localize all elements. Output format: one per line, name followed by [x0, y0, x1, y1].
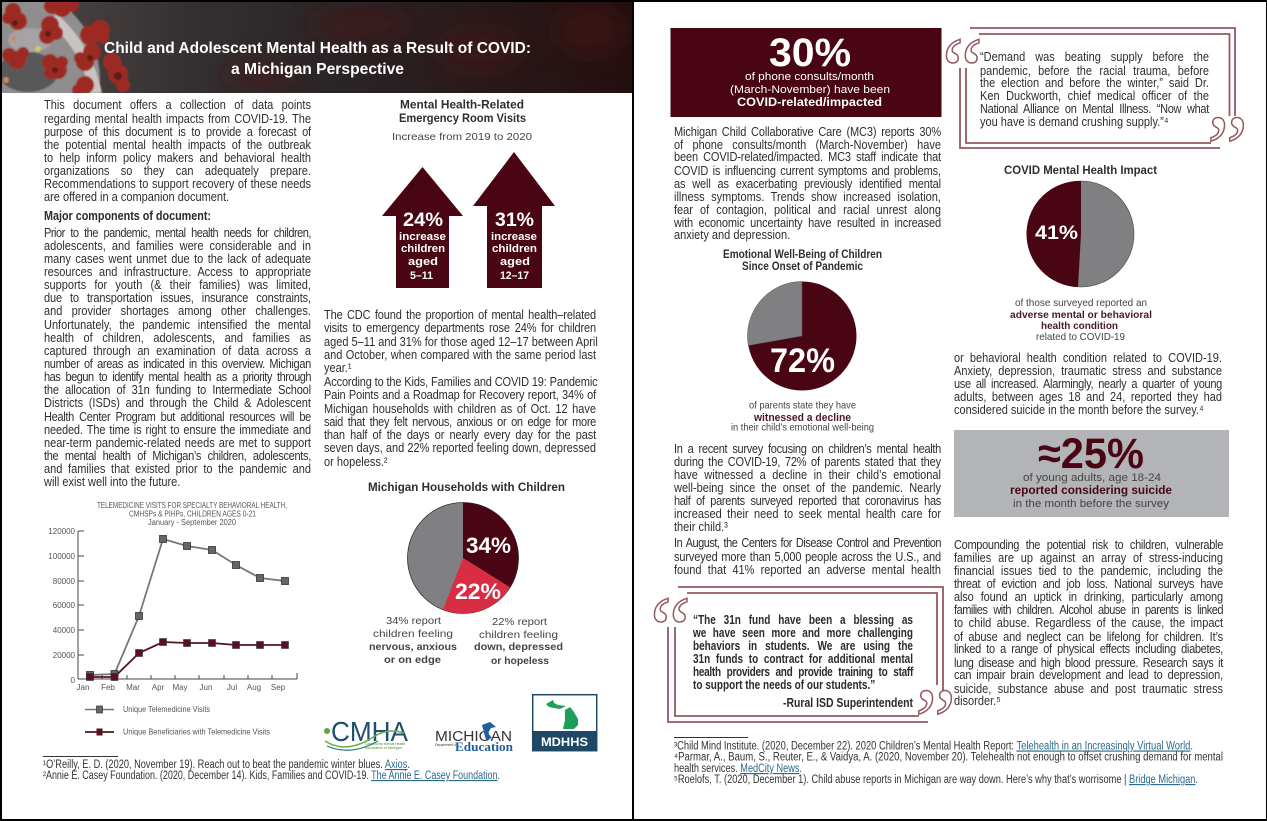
callout: 30% phone consults: COVID-related/impacted [737, 97, 882, 109]
paragraph: MC3: COVID is influencing current symptoms and problems, [674, 164, 941, 178]
x axis labels: May [172, 683, 188, 692]
major components paragraph: supports for youth (& their families) was limited, [44, 278, 311, 292]
quote frame: rural ISD superintendent [650, 578, 956, 772]
quote frame: Dr. Ken Duckworth: ” [1207, 97, 1248, 199]
footnotes right: health services. MedCity News. [674, 763, 802, 775]
major components paragraph: and families that existed prior to the pandemic and [44, 462, 311, 476]
paragraph: compounding risk: families with children. Alcohol abuse in parents is linked [954, 603, 1223, 617]
major components paragraph: many cases went unmet due to the lack of adequate [44, 252, 311, 266]
y axis labels: 40000 [53, 626, 76, 635]
line chart: telemedicine visits [48, 501, 297, 736]
footnotes left: ²Annie E. Casey Foundation. (2020, December 14). Kids, Families and COVID-19. The Annie E. Casey Foundation. [43, 770, 500, 782]
quote frame: rural ISD superintendent: “ [650, 578, 691, 680]
callout: 25% young adults: of young adults, age 18-24 [1023, 472, 1161, 484]
caption: witnessed a decline: witnessed a decline [753, 412, 851, 424]
paragraph: MC3: as well as exacerbating previously identified mental [674, 176, 941, 190]
x axis labels: Jan [77, 683, 89, 692]
paragraph: Kids, Families and COVID 19: said that they felt nervous, anxious or on edge for more [324, 415, 596, 429]
paragraph: Kids, Families and COVID 19: seven days, and 22% reported feeling down, depressed [324, 441, 596, 455]
logo: Michigan Department of Education: Department of [435, 743, 457, 747]
arrow: 24% children aged 5-11: increase [399, 231, 446, 243]
pie chart: Michigan households: 22% [455, 579, 501, 604]
paragraph: compounding risk: disorder.⁵ [954, 694, 1001, 708]
paragraph: Kids, Families and COVID 19: Pain Points and a Roadmap for Recovery report, 34% of [324, 388, 596, 402]
title [104, 40, 531, 78]
intro paragraph [44, 98, 312, 204]
paragraph: MC3: Michigan Child Collaborative Care (MC3) reports 30% [674, 125, 941, 139]
paragraph: MC3: with economic uncertainty have resulted in increased [674, 216, 941, 230]
legend: Unique Beneficiaries with Telemedicine Visits [123, 728, 270, 736]
paragraph: CDC survey: In August, the Centers for Disease Control and Prevention [674, 536, 941, 550]
header banner [2, 2, 632, 93]
paragraph: CDC: visits to emergency departments rose 24% for children [324, 321, 596, 335]
quote text: rural ISD superintendent: health providers and provide training to staff [693, 665, 913, 679]
paragraph: CDC survey [674, 536, 941, 577]
paragraph: compounding risk [954, 538, 1224, 708]
y axis labels: 120000 [48, 527, 76, 536]
x axis labels: Sep [271, 683, 286, 692]
x axis labels: Apr [152, 683, 165, 692]
logo: Michigan Department of Education: MICHIGAN [435, 728, 512, 745]
label: 22% report: or hopeless [491, 655, 549, 667]
paragraph: MC3: been COVID-related/impacted. MC3 staff indicate that [674, 150, 941, 164]
chart title: CMHSPs & PIHPs, CHILDREN AGES 0-21 [129, 510, 256, 518]
intro paragraph: purpose of this document is to provide a forecast of [44, 125, 311, 139]
callout: 30% phone consults: of phone consults/month [745, 71, 874, 83]
callout: 30% phone consults: (March-November) have been [730, 84, 890, 96]
major components paragraph: Districts (ISDs) and through the Child & Adolescent [44, 396, 311, 410]
pie chart: Michigan households [408, 502, 518, 614]
y axis labels: 100000 [48, 552, 76, 561]
x axis labels: Jun [200, 683, 212, 692]
quote text: rural ISD superintendent: “The 31n fund have been a blessing as [693, 613, 913, 627]
x axis labels: Aug [247, 683, 261, 692]
heading: emotional well-being [723, 249, 882, 273]
footnotes right [674, 738, 1223, 786]
paragraph: MC3: illness symptoms. Trends show increased isolation, [674, 190, 941, 204]
paragraph: compounding risk: linked to a range of physical effects including diabetes, [954, 642, 1223, 656]
quote frame: Dr. Ken Duckworth [942, 19, 1248, 199]
logo: CMHA: Community Mental Health [365, 742, 405, 746]
callout: 25% young adults: ≈25% [1038, 430, 1144, 478]
paragraph: behavioral health: Anxiety, depression, traumatic stress and substance [954, 364, 1222, 378]
callout: 30% phone consults: 30% [769, 31, 851, 75]
label: 22% report [474, 616, 563, 667]
logo: CMHA: Association of Michigan [365, 746, 402, 750]
legend [85, 705, 270, 736]
paragraph: behavioral health: considered suicide in the month before the survey.⁴ [954, 403, 1204, 417]
label: 34% report: children feeling [373, 628, 453, 640]
x axis labels [77, 683, 286, 692]
footnotes left [43, 756, 500, 782]
label: 22% report: children feeling [479, 629, 558, 641]
arrow: 24% children aged 5-11: aged [408, 256, 438, 268]
arrow: 31% children aged 12-17: aged [500, 256, 530, 268]
paragraph: CDC survey: surveyed more than 5,000 people across the U.S., and [674, 550, 941, 564]
series: unique beneficiaries [86, 638, 288, 680]
arrow: 24% children aged 5-11 [382, 167, 463, 288]
paragraph: CDC: and October, when compared with the same period last [324, 348, 596, 362]
major components paragraph: number of areas as indicated in this overview. Michigan [44, 357, 311, 371]
major components paragraph: and provider shortages among other challenges. [44, 304, 311, 318]
intro paragraph: the potential mental health impacts of the outbreak [44, 138, 311, 152]
paragraph: behavioral health: use all increased. Alarmingly, nearly a quarter of young [954, 377, 1222, 391]
paragraph: behavioral health [954, 351, 1222, 417]
pie chart: 41%: 41% [1035, 223, 1078, 244]
major components paragraph: will exist well into the future. [44, 475, 180, 489]
intro paragraph: regarding mental health impacts from COVID-19. The [44, 112, 311, 126]
quote text: Dr. Ken Duckworth: National Alliance on Mental Illness. “Now what [980, 102, 1209, 116]
major components paragraph [44, 226, 311, 489]
intro paragraph: to help inform policy makers and behavioral health [44, 151, 311, 165]
series: unique telemedicine visits [86, 536, 288, 678]
pie chart: Michigan households: 34% [466, 533, 511, 558]
y axis labels: 80000 [53, 577, 76, 586]
paragraph: CDC: The CDC found the proportion of mental health–related [324, 308, 596, 322]
heading: emergency room visits: Emergency Room Visits [399, 113, 526, 125]
paragraph: Kids, Families and COVID 19: than half of the days or nearly every day for the past [324, 428, 596, 442]
heading: emergency room visits: Mental Health-Related [400, 100, 524, 112]
quote text: rural ISD superintendent: to support the needs of our students.” [693, 678, 875, 692]
arrow: 24% children aged 5-11: children [401, 243, 445, 255]
intro paragraph: organizations so they can adequately prepare. [44, 164, 311, 178]
logo: MDHHS [532, 695, 597, 751]
major components paragraph: near-term pandemic-related needs are met to support [44, 436, 311, 450]
title: a Michigan Perspective [231, 61, 404, 78]
paragraph: compounding risk: to child abuse. Regardless of the cause, the impact [954, 616, 1223, 630]
y axis labels: 20000 [53, 651, 76, 660]
intro paragraph: Recommendations to support recovery of these needs [44, 177, 311, 191]
major components paragraph: needed. The time is right to ensure the immediate and [44, 423, 311, 437]
subheading: major components: Major components of document: [44, 209, 211, 223]
arrow: 31% children aged 12-17: increase [491, 231, 537, 243]
paragraph: Kids, Families and COVID 19: Michigan households with children as of Oct. 12 have [324, 402, 596, 416]
callout: 25% young adults: in the month before the survey [1013, 498, 1170, 510]
paragraph: compounding risk: financial issues tied to the pandemic, including the [954, 564, 1223, 578]
paragraph: Kids, Families and COVID 19: or hopeless.² [324, 455, 388, 469]
label: 22% report: 22% report [492, 616, 547, 628]
quote text: Dr. Ken Duckworth [980, 50, 1210, 129]
quote text: Dr. Ken Duckworth: the election and before the winter,” said Dr. [980, 76, 1209, 90]
major components paragraph: captured through an examination of data across a [44, 344, 311, 358]
label: 34% report: nervous, anxious [369, 641, 457, 653]
paragraph: recent survey: during the COVID-19, 72% of parents stated that they [674, 455, 941, 469]
pie chart: 72%: 72% [770, 342, 835, 380]
title: Child and Adolescent Mental Health as a Result of COVID: [104, 40, 531, 57]
y axis labels: 0 [71, 676, 76, 685]
major components paragraph: Health Center Program but additional resources will be [44, 410, 311, 424]
quote text: rural ISD superintendent: 31n funds to contract for additional mental [693, 652, 913, 666]
caption: adverse condition: of those surveyed reported an [1015, 297, 1147, 309]
paragraph: compounding risk: families are up against an array of stress-inducing [954, 551, 1223, 565]
callout: 25% young adults [954, 430, 1229, 517]
paragraph: compounding risk: suicide, substance abuse and post traumatic stress [954, 682, 1223, 696]
caption: adverse condition [1010, 297, 1152, 343]
paragraph: MC3: anxiety and depression. [674, 228, 790, 242]
label: 34% report: or on edge [384, 654, 441, 666]
paragraph: Kids, Families and COVID 19 [324, 375, 598, 469]
heading: emotional well-being: Emotional Well-Being of Children [723, 249, 882, 261]
y axis labels: 60000 [53, 601, 76, 610]
major components paragraph: health of children, adolescents, and families as [44, 331, 311, 345]
x axis labels: Jul [227, 683, 237, 692]
arrow: 24% children aged 5-11: 5–11 [410, 270, 433, 282]
y axis labels [48, 527, 76, 685]
chart title: TELEMEDICINE VISITS FOR SPECIALTY BEHAVIORAL HEALTH, [97, 501, 287, 510]
logo: Michigan Department of Education [435, 722, 514, 754]
chart title: January - September 2020 [148, 518, 237, 527]
footnotes left: ¹O’Reilly, E. D. (2020, November 19). Reach out to beat the pandemic winter blues. Axios. [43, 759, 410, 771]
major components paragraph: due to transportation issues, insurance constraints, [44, 291, 311, 305]
paragraph: compounding risk: lung disease and high blood pressure. Research says it [954, 656, 1223, 670]
paragraph: recent survey: well-being since the onset of the pandemic. Nearly [674, 481, 941, 495]
paragraph: recent survey: In a recent survey focusing on children’s mental health [674, 442, 941, 456]
arrow: 24% children aged 5-11: 24% [403, 210, 443, 231]
paragraph: compounding risk: threat of eviction and job loss. National surveys have [954, 577, 1223, 591]
intro paragraph: This document offers a collection of data points [44, 98, 311, 112]
chart title [97, 501, 287, 527]
quote frame: Dr. Ken Duckworth: “ [942, 19, 983, 121]
paragraph: behavioral health: adults, between ages 18 and 24, reported they had [954, 390, 1222, 404]
paragraph: behavioral health: or behavioral health condition related to COVID-19. [954, 351, 1222, 365]
label: 34% report: 34% report [386, 615, 441, 627]
intro paragraph: are offered in a companion document. [44, 190, 229, 204]
callout: 25% young adults: reported considering suicide [1010, 485, 1172, 497]
label: 22% report: down, depressed [474, 641, 563, 653]
quote text: rural ISD superintendent: behaviors in students. We are using the [693, 639, 913, 653]
paragraph: CDC: year.¹ [324, 361, 352, 375]
heading: COVID mental health impact: COVID Mental Health Impact [1004, 165, 1157, 177]
pie chart: 41% [1026, 181, 1134, 287]
paragraph: recent survey: half of parents surveyed reported that coronavirus has [674, 494, 941, 508]
heading: emergency room visits: Increase from 2019 to 2020 [392, 131, 532, 143]
heading: emotional well-being: Since Onset of Pandemic [742, 261, 864, 273]
paragraph: MC3: of phone consults/month (March-November) have [674, 138, 941, 152]
paragraph: recent survey: their child.³ [674, 520, 728, 534]
logo: CMHA: CMHA [331, 716, 408, 747]
heading: emergency room visits [392, 100, 532, 143]
callout: 30% phone consults [670, 28, 942, 117]
footnotes right: ⁵Roelofs, T. (2020, December 1). Child abuse reports in Michigan are way down. Here’s why that’s worrisome | Bridge Michigan. [674, 774, 1198, 786]
paragraph: recent survey: have witnessed a decline in their child’s emotional [674, 468, 941, 482]
label: 34% report [369, 615, 457, 666]
arrow: 31% children aged 12-17 [473, 152, 555, 288]
paragraph: CDC [324, 308, 598, 375]
arrow: 31% children aged 12-17: 12–17 [500, 270, 529, 282]
quote frame: rural ISD superintendent: ” [915, 670, 956, 772]
caption: adverse condition: adverse mental or behavioral [1010, 309, 1152, 321]
paragraph: Kids, Families and COVID 19: According to the Kids, Families and COVID 19: Pandemic [324, 375, 598, 389]
major components paragraph: the mental health of Michigan’s children, adolescents, [44, 449, 311, 463]
quote frame: rural ISD superintendent: -Rural ISD Superintendent [783, 696, 914, 710]
paragraph: compounding risk: also found an uptick in drinking, particularly among [954, 590, 1223, 604]
logo: Michigan Department of Education: Education [455, 739, 514, 754]
virus image [2, 2, 623, 93]
arrow: 31% children aged 12-17: children [492, 243, 537, 255]
caption: witnessed a decline [731, 400, 874, 434]
quote text: Dr. Ken Duckworth: “Demand was beating supply before the [980, 50, 1209, 64]
heading: Michigan households: Michigan Households with Children [368, 482, 565, 494]
major components paragraph: has begun to identify mental health as a priority through [44, 370, 311, 384]
major components paragraph: Prior to the pandemic, mental health needs for children, [44, 226, 311, 240]
axes [78, 531, 297, 679]
x axis labels: Feb [101, 683, 115, 692]
paragraph: recent survey [674, 442, 942, 534]
quote text: Dr. Ken Duckworth: Ken Duckworth, chief medical officer of the [980, 89, 1209, 103]
caption: witnessed a decline: in their child’s emotional well-being [731, 422, 874, 434]
caption: adverse condition: related to COVID-19 [1036, 331, 1125, 343]
major components paragraph: adolescents, and families were considerable and in [44, 239, 311, 253]
quote text: rural ISD superintendent: we have seen more and more challenging [693, 626, 913, 640]
x axis labels: Mar [126, 683, 140, 692]
paragraph: compounding risk: Compounding the potential risk to children, vulnerable [954, 538, 1223, 552]
quote text: rural ISD superintendent [693, 613, 914, 692]
caption: witnessed a decline: of parents state they have [749, 400, 856, 412]
paragraph: compounding risk: can impair brain development and lead to depression, [954, 668, 1223, 682]
quote text: Dr. Ken Duckworth: pandemic, before the racial trauma, before [980, 64, 1209, 78]
paragraph: MC3: fear of contagion, political and racial unrest along [674, 202, 941, 216]
major components paragraph: Unfortunately, the pandemic intensified the mental [44, 318, 311, 332]
paragraph: CDC survey: found that 41% reported an adverse mental health [674, 563, 941, 577]
paragraph: MC3 [674, 125, 941, 242]
major components paragraph: resources and infrastructure. Access to appropriate [44, 265, 311, 279]
legend: Unique Telemedicine Visits [123, 705, 210, 714]
pie chart: 72% [747, 282, 856, 390]
paragraph: compounding risk: of abuse and neglect can be lifelong for children. It’s [954, 630, 1223, 644]
paragraph: CDC: aged 5–11 and 31% for those aged 12–17 between April [324, 335, 598, 349]
quote text: Dr. Ken Duckworth: you have is demand crushing supply.”⁴ [980, 115, 1169, 129]
arrow: 31% children aged 12-17: 31% [495, 210, 534, 231]
caption: adverse condition: health condition [1041, 320, 1118, 332]
major components paragraph: the allocation of 31n funding to Intermediate School [44, 383, 311, 397]
footnotes right: ³Child Mind Institute. (2020, December 22). 2020 Children’s Mental Health Report: Telehealth in an Increasingly Virtual World. [674, 740, 1193, 752]
paragraph: recent survey: increased their need to seek mental health care for [674, 507, 941, 521]
logo: MDHHS: MDHHS [541, 735, 588, 749]
